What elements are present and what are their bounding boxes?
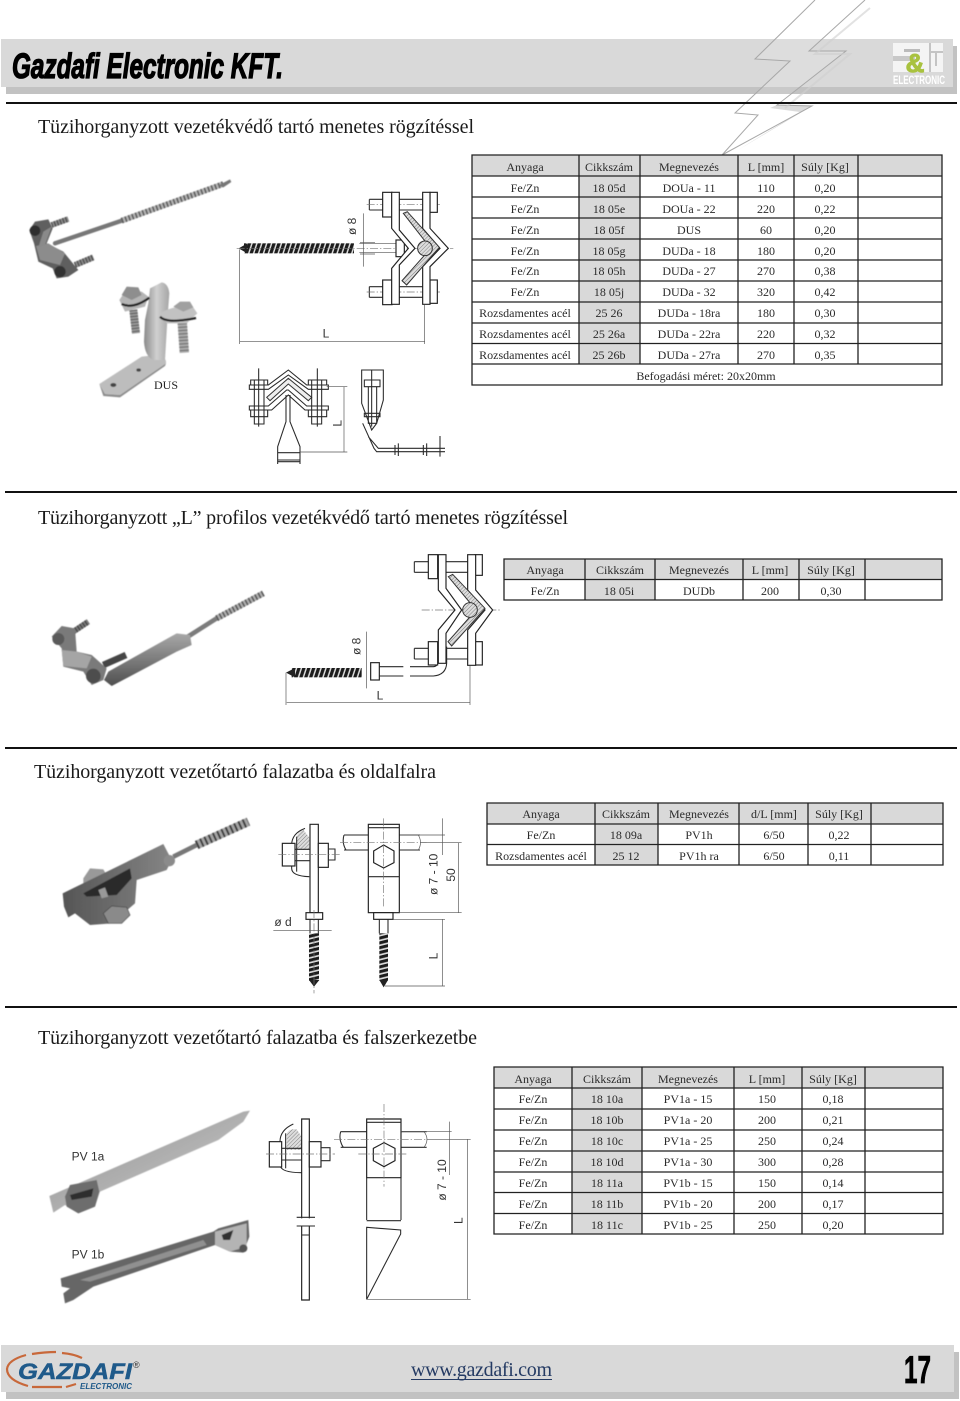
- label: DUS: DUS: [154, 378, 178, 392]
- table: section 4: 18 11a: [591, 1176, 624, 1190]
- technical drawing: L-profile side view: L: [377, 688, 384, 702]
- table: section 1: 18 05h: [592, 264, 626, 278]
- table: section 2: DUDb: [683, 584, 715, 598]
- table: section 1: 180: [757, 306, 775, 320]
- table: section 1: 25 26a: [593, 327, 626, 341]
- Gazdafi logo: [7, 1352, 140, 1391]
- table: section 1: 270: [757, 348, 775, 362]
- table: section 4: Fe/Zn: [519, 1092, 547, 1106]
- table: section 1: DUDa - 27ra: [658, 348, 721, 362]
- table: section 1: Rozsdamentes acél: [479, 306, 571, 320]
- table: section 4: PV1b - 15: [663, 1176, 713, 1190]
- heading: section 3: Tüzihorganyzott vezetőtartó falazatba és oldalfalra: [34, 761, 436, 783]
- table: section 1: 0,42: [814, 285, 836, 299]
- table: section 2: Anyaga: [526, 563, 564, 577]
- table: section 3: 18 09a: [610, 828, 643, 842]
- table: section 4: 18 10c: [591, 1134, 623, 1148]
- Gazdafi logo: ®: [133, 1360, 140, 1370]
- photo: L-profile clamp: [52, 593, 263, 686]
- table: section 4: Fe/Zn: [519, 1113, 547, 1127]
- table: section 1: Fe/Zn: [511, 202, 539, 216]
- table: section 1: Fe/Zn: [511, 264, 539, 278]
- header title: Gazdafi Electronic KFT.: [12, 47, 283, 86]
- table: section 3: 0,11: [829, 849, 849, 863]
- table: section 4: 0,14: [822, 1176, 844, 1190]
- heading: section 2: Tüzihorganyzott „L” profilos vezetékvédő tartó menetes rögzítéssel: [38, 507, 568, 529]
- table: section 1: 18 05j: [594, 285, 624, 299]
- table: section 1: 25 26b: [592, 348, 626, 362]
- technical drawing: screw side view: L: [323, 327, 330, 341]
- table: section 1: L [mm]: [748, 160, 784, 174]
- table: section 1: DUDa - 27: [662, 264, 716, 278]
- table: section 1: Fe/Zn: [511, 285, 539, 299]
- table: section 3: d/L [mm]: [751, 807, 797, 821]
- Gazdafi logo: ELECTRONIC: [80, 1382, 132, 1391]
- heading: section 1: Tüzihorganyzott vezetékvédő tartó menetes rögzítéssel: [38, 116, 474, 138]
- table: section 4: Fe/Zn: [519, 1218, 547, 1232]
- table: section 3: 0,22: [828, 828, 850, 842]
- technical drawing: flat holder views: L: [452, 1217, 466, 1224]
- table: section 3: Cikkszám: [602, 807, 651, 821]
- table: section 4: Megnevezés: [658, 1072, 718, 1086]
- table: section 2: [504, 559, 942, 600]
- table: section 4: 200: [758, 1113, 776, 1127]
- photo: PV1a and PV1b flat holders: [49, 1111, 250, 1303]
- table: section 4: 300: [758, 1155, 776, 1169]
- table: section 1: Súly [Kg]: [801, 160, 849, 174]
- table: section 1: DOUa - 22: [662, 202, 716, 216]
- heading: section 4: Tüzihorganyzott vezetőtartó falazatba és falszerkezetbe: [38, 1027, 477, 1049]
- table: section 3: PV1h: [685, 828, 713, 842]
- table: section 4: 250: [758, 1218, 776, 1232]
- table: section 1: 270: [757, 264, 775, 278]
- technical drawing: clamp front and side views: [249, 368, 445, 464]
- table: section 1: Fe/Zn: [511, 181, 539, 195]
- table: section 1: 320: [757, 285, 775, 299]
- table: section 1: 0,32: [814, 327, 836, 341]
- table: section 2: Súly [Kg]: [807, 563, 855, 577]
- table: section 4: 0,20: [822, 1218, 844, 1232]
- table: section 1: 110: [757, 181, 775, 195]
- table: section 4: 0,21: [822, 1113, 844, 1127]
- technical drawing: L-profile side view: ø 8: [350, 637, 364, 655]
- table: section 4: Fe/Zn: [519, 1197, 547, 1211]
- table: section 1: 220: [757, 327, 775, 341]
- table: section 1: 0,35: [814, 348, 836, 362]
- Gazdafi logo: GAZDAFI: [18, 1359, 133, 1384]
- divider rules: [5, 102, 957, 1008]
- table: section 4: 18 11b: [591, 1197, 623, 1211]
- table: section 2: 200: [761, 584, 779, 598]
- table: section 3: Súly [Kg]: [815, 807, 863, 821]
- table: section 1: Megnevezés: [659, 160, 719, 174]
- table: section 1: Fe/Zn: [511, 244, 539, 258]
- technical drawing: screw side view: [237, 192, 453, 344]
- technical drawing: wall-mount holder views: ø d: [274, 915, 292, 929]
- table: section 1: 180: [757, 244, 775, 258]
- table: section 3: 6/50: [763, 849, 785, 863]
- table: section 4: Anyaga: [514, 1072, 552, 1086]
- table: section 4: PV1a - 25: [664, 1134, 712, 1148]
- table: section 1: Cikkszám: [585, 160, 634, 174]
- table: section 1: DUS: [677, 223, 701, 237]
- table: section 4: 0,18: [822, 1092, 844, 1106]
- technical drawing: wall-mount holder views: [273, 818, 462, 993]
- table: section 4: PV1b - 20: [663, 1197, 713, 1211]
- footer band: [1, 1345, 959, 1399]
- table: section 1: DOUa - 11: [663, 181, 715, 195]
- table: section 4: [494, 1067, 943, 1234]
- S&G Electronic logo: [893, 43, 945, 87]
- table: section 4: Súly [Kg]: [809, 1072, 857, 1086]
- S&G Electronic logo: &: [906, 48, 924, 78]
- table: section 1: [472, 155, 942, 385]
- table: section 4: Fe/Zn: [519, 1134, 547, 1148]
- table: section 1: DUDa - 18ra: [658, 306, 721, 320]
- table: section 1: 25 26: [596, 306, 622, 320]
- table: section 4: 18 10b: [590, 1113, 624, 1127]
- table: section 1: 0,38: [814, 264, 836, 278]
- table: section 1: Anyaga: [506, 160, 544, 174]
- table: section 2: 18 05i: [604, 584, 635, 598]
- table: section 4: 18 10a: [591, 1092, 624, 1106]
- table: section 4: 18 11c: [591, 1218, 623, 1232]
- table: section 4: 0,28: [822, 1155, 844, 1169]
- table: section 4: 150: [758, 1176, 776, 1190]
- table: section 4: 0,17: [822, 1197, 844, 1211]
- table: section 4: PV1a - 20: [664, 1113, 712, 1127]
- table: section 1: 18 05e: [593, 202, 625, 216]
- technical drawing: L-profile side view: [286, 555, 500, 705]
- table: section 4: Cikkszám: [583, 1072, 632, 1086]
- table: section 1: DUDa - 22ra: [658, 327, 721, 341]
- table: section 2: L [mm]: [752, 563, 788, 577]
- technical drawing: wall-mount holder views: 50: [444, 868, 458, 882]
- table: section 1: 0,30: [814, 306, 836, 320]
- page number: 17: [904, 1349, 931, 1392]
- table: section 3: Megnevezés: [669, 807, 729, 821]
- table: section 1: DUDa - 32: [662, 285, 716, 299]
- table: section 2: Cikkszám: [596, 563, 645, 577]
- table: section 1: 220: [757, 202, 775, 216]
- table: section 3: Rozsdamentes acél: [495, 849, 587, 863]
- label: PV 1a: PV 1a: [72, 1149, 105, 1163]
- table: section 3: 25 12: [612, 849, 640, 863]
- photo: threaded rod clamp: [29, 179, 231, 278]
- table: section 3: Fe/Zn: [527, 828, 555, 842]
- table: section 4: Fe/Zn: [519, 1176, 547, 1190]
- photo: DUS bracket: [99, 282, 197, 397]
- table: section 4: 0,24: [822, 1134, 844, 1148]
- table: section 3: [487, 803, 943, 865]
- technical drawing: wall-mount holder views: ø 7 - 10: [426, 853, 440, 895]
- table: section 4: Fe/Zn: [519, 1155, 547, 1169]
- table: section 1: Rozsdamentes acél: [479, 327, 571, 341]
- table: section 1: 60: [760, 223, 772, 237]
- table: section 4: L [mm]: [749, 1072, 785, 1086]
- lightning bolt decoration: [722, 0, 870, 155]
- table: section 3: PV1h ra: [679, 849, 720, 863]
- technical drawing: flat holder views: [266, 1104, 471, 1300]
- table: section 3: 6/50: [763, 828, 785, 842]
- header band: [1, 39, 957, 94]
- table: section 3: Anyaga: [522, 807, 560, 821]
- table: section 1: 18 05g: [592, 244, 626, 258]
- photo: wall-mount conductor holder: [63, 822, 248, 925]
- table: section 1: 18 05d: [592, 181, 626, 195]
- table: section 1: 0,20: [814, 181, 836, 195]
- table: section 4: 150: [758, 1092, 776, 1106]
- table: section 1: 0,20: [814, 223, 836, 237]
- table: section 4: 250: [758, 1134, 776, 1148]
- table: section 1: Rozsdamentes acél: [479, 348, 571, 362]
- table: section 2: 0,30: [820, 584, 842, 598]
- table: section 4: PV1b - 25: [663, 1218, 713, 1232]
- table: section 1: DUDa - 18: [662, 244, 716, 258]
- table: section 1: Fe/Zn: [511, 223, 539, 237]
- website link text: www.gazdafi.com: [411, 1359, 552, 1381]
- technical drawing: screw side view: ø 8: [345, 217, 359, 235]
- table: section 4: 18 10d: [590, 1155, 624, 1169]
- table: section 2: Megnevezés: [669, 563, 729, 577]
- technical drawing: wall-mount holder views: L: [426, 952, 440, 959]
- table: section 4: PV1a - 15: [664, 1092, 712, 1106]
- technical drawing: flat holder views: ø 7 - 10: [435, 1159, 449, 1201]
- technical drawing: clamp front and side views: L: [331, 420, 345, 427]
- label: PV 1b: PV 1b: [72, 1247, 105, 1261]
- table: section 1: 0,22: [814, 202, 836, 216]
- table: section 1: 18 05f: [594, 223, 624, 237]
- table: section 4: 200: [758, 1197, 776, 1211]
- table: section 2: Fe/Zn: [531, 584, 559, 598]
- table: section 1: Befogadási méret: 20x20mm: [636, 369, 776, 383]
- table: section 4: PV1a - 30: [664, 1155, 712, 1169]
- table: section 1: 0,20: [814, 244, 836, 258]
